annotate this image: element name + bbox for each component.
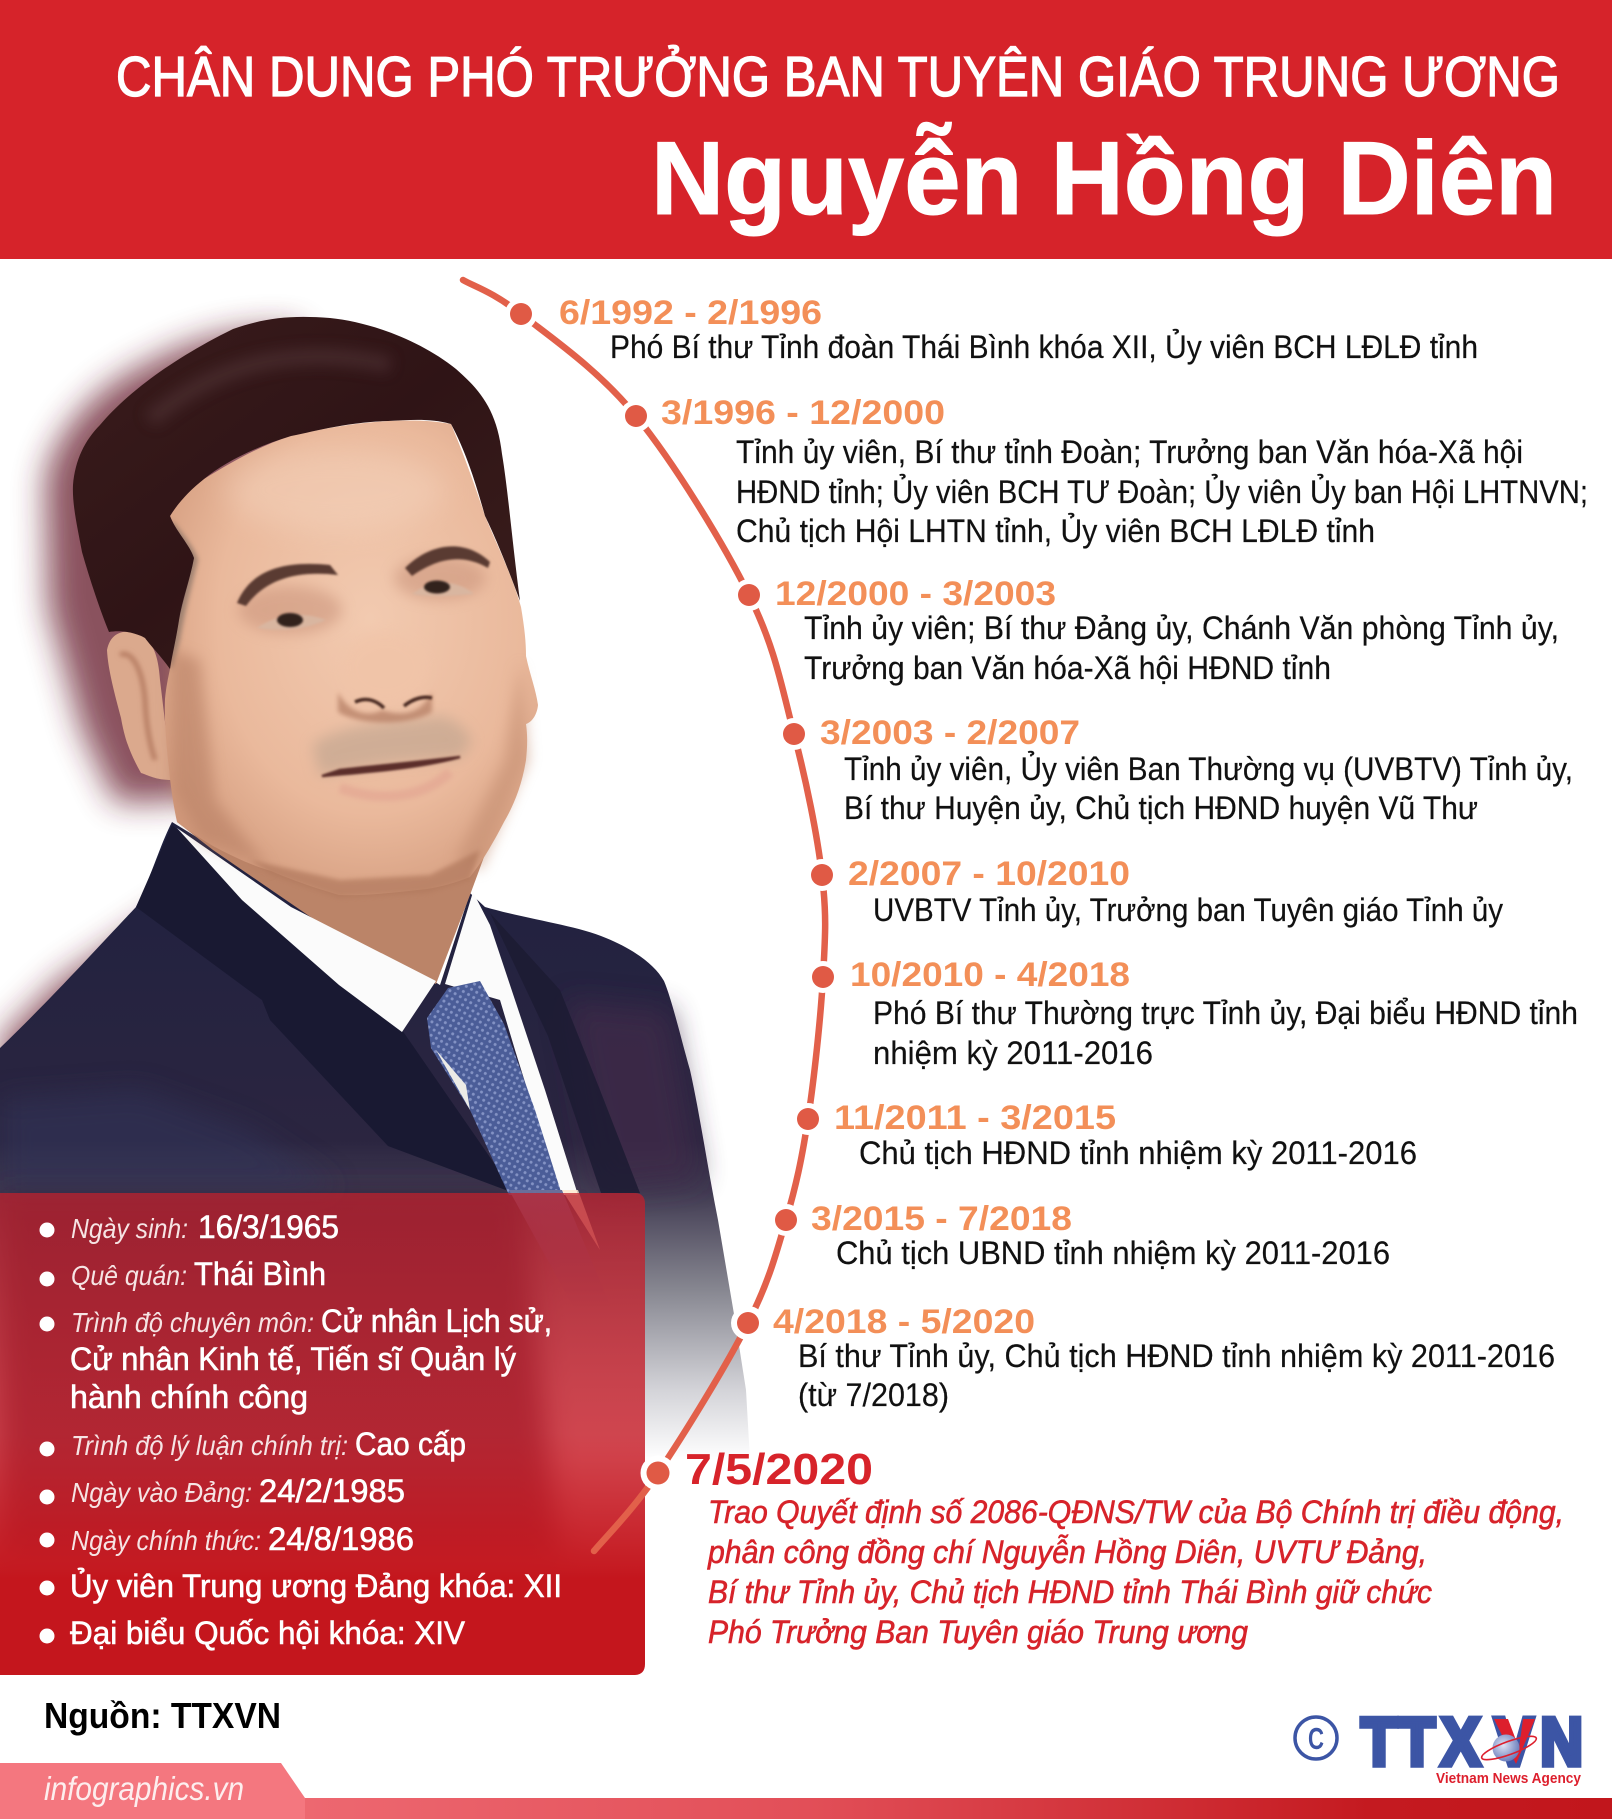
right lapel bbox=[490, 913, 640, 1193]
timeline entry 2018-2020 bbox=[773, 1303, 1555, 1413]
nose bbox=[341, 632, 429, 704]
left sleeve sheen bbox=[0, 1090, 340, 1190]
info: political theory: Trình độ lý luận chính trị: bbox=[71, 1430, 348, 1461]
timeline entry final appointment 7/5/2020: Phó Trưởng Ban Tuyên giáo Trung ương bbox=[708, 1614, 1248, 1650]
panel background bbox=[0, 1193, 645, 1675]
inner ear bbox=[120, 654, 155, 760]
hair bbox=[73, 317, 520, 669]
website label: infographics.vn bbox=[44, 1770, 244, 1807]
timeline entry 1996-2000 bbox=[661, 394, 1588, 549]
timeline entry 2010-2018: 10/2010 - 4/2018 bbox=[850, 956, 1130, 994]
logo: globe bbox=[1480, 1732, 1538, 1764]
info: hometown: Thái Bình bbox=[194, 1256, 326, 1292]
suit jacket bbox=[0, 822, 750, 1460]
timeline entry 2003-2007: Bí thư Huyện ủy, Chủ tịch HĐND huyện Vũ Thư bbox=[844, 790, 1478, 826]
timeline entry 1992-1996 bbox=[559, 294, 1478, 365]
eyebrow right bbox=[405, 546, 490, 576]
personal information panel bbox=[0, 1193, 645, 1675]
info: education bbox=[40, 1303, 552, 1415]
timeline entry final appointment 7/5/2020: Trao Quyết định số 2086-QĐNS/TW của Bộ Chính trị điều động, bbox=[708, 1494, 1564, 1530]
timeline entry 1992-1996: 6/1992 - 2/1996 bbox=[559, 294, 822, 332]
timeline entry 2010-2018 bbox=[850, 956, 1578, 1071]
nostrils bbox=[355, 697, 432, 708]
timeline entry 2015-2018 bbox=[811, 1200, 1390, 1271]
info: official member date: Ngày chính thức: bbox=[71, 1525, 261, 1556]
eye socket right shading bbox=[394, 556, 486, 600]
info: date of birth: 16/3/1965 bbox=[198, 1209, 339, 1245]
necktie bbox=[427, 981, 562, 1195]
neck bbox=[177, 800, 505, 984]
timeline entry 2003-2007: 3/2003 - 2/2007 bbox=[820, 714, 1080, 752]
timeline entry 2007-2010 bbox=[848, 855, 1503, 928]
timeline entry 2011-2015: Chủ tịch HĐND tỉnh nhiệm kỳ 2011-2016 bbox=[859, 1135, 1417, 1171]
suit sheen right bbox=[565, 1000, 700, 1190]
eye socket left shading bbox=[238, 586, 342, 634]
timeline entry 1996-2000: Tỉnh ủy viên, Bí thư tỉnh Đoàn; Trưởng ban Văn hóa-Xã hội bbox=[736, 434, 1523, 470]
logo: red V bbox=[1494, 1719, 1535, 1764]
timeline entry 2000-2003 bbox=[775, 575, 1559, 686]
mouth bbox=[322, 757, 460, 776]
info: education: Cử nhân Kinh tế, Tiến sĩ Quản lý bbox=[70, 1341, 516, 1377]
timeline entry 2000-2003: Trưởng ban Văn hóa-Xã hội HĐND tỉnh bbox=[804, 650, 1331, 686]
timeline entry final appointment 7/5/2020 bbox=[685, 1445, 1564, 1650]
timeline dots bbox=[505, 298, 839, 1490]
info: official member date bbox=[40, 1521, 414, 1557]
shirt continuation behind panel bbox=[562, 1190, 600, 1250]
timeline entry 2000-2003: Tỉnh ủy viên; Bí thư Đảng ủy, Chánh Văn phòng Tỉnh ủy, bbox=[804, 610, 1559, 646]
info: party admission: 24/2/1985 bbox=[259, 1473, 405, 1509]
copyright icon bbox=[1295, 1717, 1337, 1759]
timeline entry 2018-2020: Bí thư Tỉnh ủy, Chủ tịch HĐND tỉnh nhiệm kỳ 2011-2016 bbox=[798, 1338, 1555, 1374]
cheek shadow bbox=[170, 650, 270, 870]
portrait shadow bbox=[0, 329, 320, 1100]
nose underside shadow bbox=[338, 692, 432, 722]
timeline entry 1996-2000: 3/1996 - 12/2000 bbox=[661, 394, 945, 432]
timeline entry 1992-1996: Phó Bí thư Tỉnh đoàn Thái Bình khóa XII, Ủy viên BCH LĐLĐ tỉnh bbox=[610, 329, 1478, 365]
info: national assembly: Đại biểu Quốc hội khóa: XIV bbox=[70, 1615, 466, 1651]
timeline entry 2015-2018: Chủ tịch UBND tỉnh nhiệm kỳ 2011-2016 bbox=[836, 1235, 1390, 1271]
face bbox=[165, 420, 538, 895]
temple grey hair bbox=[160, 520, 198, 670]
moustache stubble bbox=[312, 716, 472, 776]
timeline entry 2015-2018: 3/2015 - 7/2018 bbox=[811, 1200, 1072, 1238]
info: education: hành chính công bbox=[70, 1379, 308, 1415]
left lapel bbox=[136, 825, 519, 1195]
info: hometown bbox=[40, 1256, 326, 1292]
info: central committee: Ủy viên Trung ương Đảng khóa: XII bbox=[70, 1568, 562, 1604]
timeline entry 2011-2015 bbox=[834, 1099, 1417, 1171]
info: date of birth bbox=[40, 1209, 339, 1245]
source credit: Nguồn: TTXVN bbox=[44, 1695, 281, 1736]
timeline entry final appointment 7/5/2020: Bí thư Tỉnh ủy, Chủ tịch HĐND tỉnh Thái Bình giữ chức bbox=[708, 1574, 1432, 1610]
timeline arc bbox=[463, 280, 839, 1551]
timeline entry 2010-2018: Phó Bí thư Thường trực Tỉnh ủy, Đại biểu HĐND tỉnh bbox=[873, 995, 1578, 1031]
timeline entry 2007-2010: 2/2007 - 10/2010 bbox=[848, 855, 1130, 893]
forehead highlight bbox=[225, 448, 445, 532]
copyright icon: C bbox=[1308, 1721, 1324, 1756]
timeline entry 2018-2020: 4/2018 - 5/2020 bbox=[773, 1303, 1035, 1341]
timeline entry 2010-2018: nhiệm kỳ 2011-2016 bbox=[873, 1035, 1153, 1071]
shirt collar left bbox=[177, 828, 436, 1032]
hair highlight bbox=[150, 357, 390, 420]
shirt triangle bbox=[436, 1050, 470, 1110]
title: person name: Nguyễn Hồng Diên bbox=[651, 121, 1557, 237]
info: party admission bbox=[40, 1473, 405, 1509]
info: education: Trình độ chuyên môn: bbox=[71, 1307, 314, 1338]
timeline entry final appointment 7/5/2020: 7/5/2020 bbox=[685, 1445, 873, 1494]
timeline entry 2011-2015: 11/2011 - 3/2015 bbox=[834, 1099, 1116, 1137]
lower lip bbox=[340, 772, 450, 796]
info: date of birth: Ngày sinh: bbox=[71, 1213, 188, 1244]
info: political theory: Cao cấp bbox=[355, 1426, 466, 1462]
timeline entry final appointment 7/5/2020: phân công đồng chí Nguyễn Hồng Diên, UVTƯ Đảng, bbox=[707, 1534, 1427, 1570]
info: political theory bbox=[40, 1426, 466, 1462]
timeline entry 2007-2010: UVBTV Tỉnh ủy, Trưởng ban Tuyên giáo Tỉnh ủy bbox=[873, 892, 1503, 928]
footer strip bbox=[0, 1763, 1612, 1819]
dark suit body behind panel bbox=[0, 1190, 560, 1560]
header banner bbox=[0, 0, 1612, 259]
info: education: Cử nhân Lịch sử, bbox=[321, 1303, 552, 1339]
ear bbox=[107, 632, 172, 780]
timeline entry 2003-2007 bbox=[820, 714, 1573, 826]
jaw shadow bbox=[250, 850, 480, 898]
eyebrow left bbox=[237, 564, 338, 606]
shirt collar right and placket bbox=[445, 892, 578, 1195]
timeline entry 2000-2003: 12/2000 - 3/2003 bbox=[775, 575, 1056, 613]
portrait photo of Nguyễn Hồng Diên bbox=[0, 317, 750, 1560]
necktie continuation behind panel bbox=[509, 1190, 612, 1310]
timeline entry 1996-2000: Chủ tịch Hội LHTN tỉnh, Ủy viên BCH LĐLĐ tỉnh bbox=[736, 513, 1375, 549]
info: party admission: Ngày vào Đảng: bbox=[71, 1477, 252, 1508]
eye left bbox=[257, 613, 326, 630]
right cheek shadow bbox=[455, 660, 528, 870]
eye right bbox=[412, 580, 474, 596]
logo: agency name: Vietnam News Agency bbox=[1436, 1771, 1581, 1787]
footer tab bbox=[0, 1763, 305, 1819]
info: hometown: Quê quán: bbox=[71, 1260, 187, 1291]
info: official member date: 24/8/1986 bbox=[268, 1521, 414, 1557]
timeline entry 2018-2020: (từ 7/2018) bbox=[798, 1377, 949, 1413]
timeline entry 2003-2007: Tỉnh ủy viên, Ủy viên Ban Thường vụ (UVBTV) Tỉnh ủy, bbox=[844, 751, 1573, 787]
TTXVN logo: TTXVN bbox=[1361, 1703, 1583, 1780]
